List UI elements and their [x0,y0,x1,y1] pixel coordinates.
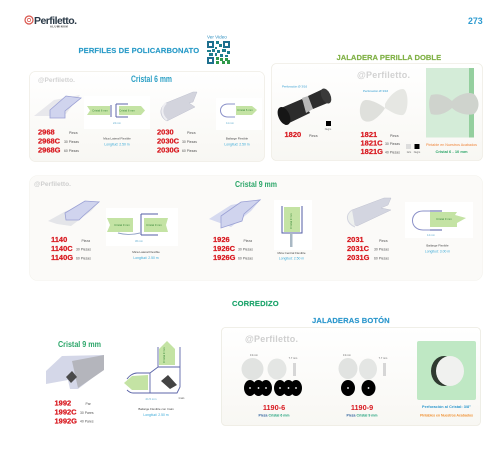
title: cristal 9 mm corner: Cristal 9 mm [58,340,101,349]
diagram 2030: 11 mm [226,121,234,125]
buttons 1190-9: 7.7 mm [379,356,387,360]
codes 1926: 1926 [213,235,230,244]
glass photo [426,68,478,138]
codes 1926 [213,235,253,262]
buttons 1190-6: 7.7 mm [289,356,297,360]
caption 2031: Bailarge Flexible [426,244,449,248]
codes 2031: 2031G [347,253,370,262]
codes 2030: 2030 [157,128,174,136]
codes 2968: 30 Piezas [64,140,79,144]
diagram 1992 [124,341,185,401]
codes 1926: Pieza [244,239,252,243]
codes 1140: 1140C [51,244,73,253]
diagram 1992: 21.5 mm [146,397,157,401]
codes 2030: Pieza [187,131,196,135]
code 1190-6 [259,403,289,418]
codes 1821: 40 Piezas [385,150,400,154]
caption 1926: Longitud: 2.50 m [279,256,304,260]
buttons 1190-6 [242,353,302,396]
note pintable: Pintables en Nuestros Acabados [420,414,473,418]
diagram 2968: Cristal 6 mm [92,108,109,112]
codes 2030: 30 Piezas [182,140,197,144]
codes 2031: 30 Piezas [374,248,389,252]
caption 1140: Longitud: 2.50 m [133,256,159,260]
profile 1992 image [46,355,104,389]
swatches 1821: Gris [407,151,412,154]
code 1190-9: Pieza Cristal 9 mm [347,414,377,418]
diagram 2968: Cristal 6 mm [119,108,136,112]
caption 1140: Mica Lateral Flexible [132,250,160,254]
code 1820: Pieza [309,134,318,138]
codes 2030 [157,128,197,154]
profile 1140 image [48,201,100,226]
buttons 1190-9 [338,353,387,396]
codes 2968: 2968 [38,128,55,136]
codes 2031: Pieza [379,239,388,243]
swatches 1821: Negro [414,151,421,154]
diagram 1140: Cristal 9 mm [146,223,163,227]
buttons 1190-6: 13 mm [250,353,258,357]
codes 1140: 1140G [51,253,73,262]
caption 1140 [132,250,160,260]
profile 2968 image [34,95,81,118]
diagram 2030 [216,98,262,130]
codes 1821 [360,130,400,156]
diagram 2968 [84,96,150,129]
swatch negro 1820 [325,121,332,131]
knob 1821 [360,89,408,122]
codes 2968 [38,128,79,154]
panel title: Cristal 9 mm [235,179,277,189]
panel logo: @Perfiletto. [357,70,410,80]
knob 1820 [275,87,333,127]
panel title: Cristal 6 mm [131,74,172,84]
heading: corredizo: CORREDIZO [232,299,279,308]
codes 2030: 60 Piezas [182,149,197,153]
label perforacion 1820: Perforación Ø 3/16 [282,84,308,88]
diagram 2031: Cristal 9 mm [436,217,453,221]
codes 2031: 60 Piezas [374,256,389,260]
codes 2031: 2031C [347,244,370,253]
diagram 1140: 36 mm [135,239,143,243]
codes 1140: Pieza [82,239,90,243]
swatches 1821 [406,144,421,154]
codes 1992: 30 Pares [80,411,94,415]
heading: jaladeras boton: JALADERAS BOTÓN [312,316,390,325]
caption 1926: Mica Central Flexible [277,251,306,255]
code 1190-9: 1190-9 [351,403,373,412]
codes 1821: 1821G [360,147,383,156]
code 1190-6: Pieza Cristal 6 mm [259,414,289,418]
diagram 2031 [405,202,473,238]
panel logo: @Perfiletto. [245,334,298,344]
codes 1821: Pieza [390,134,399,138]
caption 2030 [224,136,250,146]
diagram 2030: Cristal 6 mm [237,108,254,112]
profile 2031 image [347,198,391,227]
buttons 1190-9: 13 mm [343,353,351,357]
diagram 1140: Cristal 9 mm [114,223,131,227]
codes 1140: 1140 [51,235,67,244]
diagram 1926: Cristal 9 mm [289,212,293,229]
heading: jaladera perilla doble: JALADERA PERILLA DOBLE [336,53,442,62]
diagram 1992: Cristal 9 mm [162,346,166,363]
panel logo: @Perfiletto. [34,181,71,188]
diagram 1992: Imán [179,396,185,400]
codes 2968: 2968C [38,137,61,146]
panel: cristal 9 mm [30,176,482,280]
caption 2031: Longitud: 3.00 m [425,250,450,254]
logo: Perfiletto. [34,15,77,27]
codes 1821: 30 Piezas [385,142,400,146]
codes 1992 [54,398,94,426]
caption 1992 [138,407,174,417]
heading: perfiles de policarbonato: PERFILES DE POLICARBONATO [78,46,200,55]
caption 1992: Bailarge Flexible con Imán [138,407,174,411]
diagram 1926 [274,200,312,250]
codes 1140: 60 Piezas [76,256,91,260]
codes 1821: 1821 [360,130,377,139]
QR code [207,34,230,64]
codes 1926: 30 Piezas [238,248,253,252]
codes 2968: Pieza [69,131,78,135]
logo: ALUMINUM [50,24,68,28]
code 1190-6: 1190-6 [263,403,285,412]
codes 1992: 1992 [54,398,71,408]
caption 2030: Longitud: 2.50 m [224,142,250,146]
panel: jaladera perilla doble [272,64,482,160]
diagram 2031: 14 mm [427,233,435,237]
caption 1926 [277,251,306,260]
codes 2968: 2968G [38,146,61,154]
codes 1926: 1926G [213,253,236,262]
codes 1992: Par [86,402,92,406]
panel: jaladeras boton [222,328,480,426]
code 1820: 1820 [284,130,301,139]
codes 1992: 1992G [54,416,77,426]
caption 2968: Longitud: 2.50 m [104,142,130,146]
note orange: Pintable en Nuestros Acabados [426,143,477,147]
QR code: Ver Video [207,34,227,40]
codes 2031: 2031 [347,235,364,244]
note perforacion: Perforación al Cristal: 3/8" [422,405,471,409]
caption 2968 [103,136,131,146]
code 1820 [284,130,318,139]
codes 1926: 1926C [213,244,236,253]
codes 2030: 2030G [157,146,180,154]
codes 1140: 30 Piezas [76,248,91,252]
codes 1140 [51,235,91,262]
label perforacion 1821: Perforación Ø 3/16 [363,89,389,93]
codes 1821: 1821C [360,138,383,148]
page number: 273 [468,16,483,26]
codes 2968: 60 Piezas [64,149,79,153]
caption 2030: Bailarge Flexible [226,136,248,140]
codes 1992: 1992C [54,408,77,416]
diagram 2968: 24 mm [113,121,121,125]
panel: cristal 6 mm [30,72,264,162]
caption 1992: Longitud: 2.50 m [143,413,169,417]
caption 2031 [425,244,450,254]
diagram 1140 [106,208,178,246]
profile 1926 image [209,199,261,228]
code 1190-9 [347,403,377,418]
note green: Cristal 6 - 10 mm [435,149,468,154]
caption 2968: Mica Lateral Flexible [103,136,131,140]
codes 1992: 40 Pares [80,420,94,424]
codes 2030: 2030C [157,136,180,146]
codes 2031 [347,235,389,262]
swatch negro 1820: Negro [325,128,332,131]
codes 1926: 60 Piezas [238,256,253,260]
panel logo: @Perfiletto. [38,77,75,84]
button photo [417,341,476,400]
profile 2030 image [161,92,197,121]
